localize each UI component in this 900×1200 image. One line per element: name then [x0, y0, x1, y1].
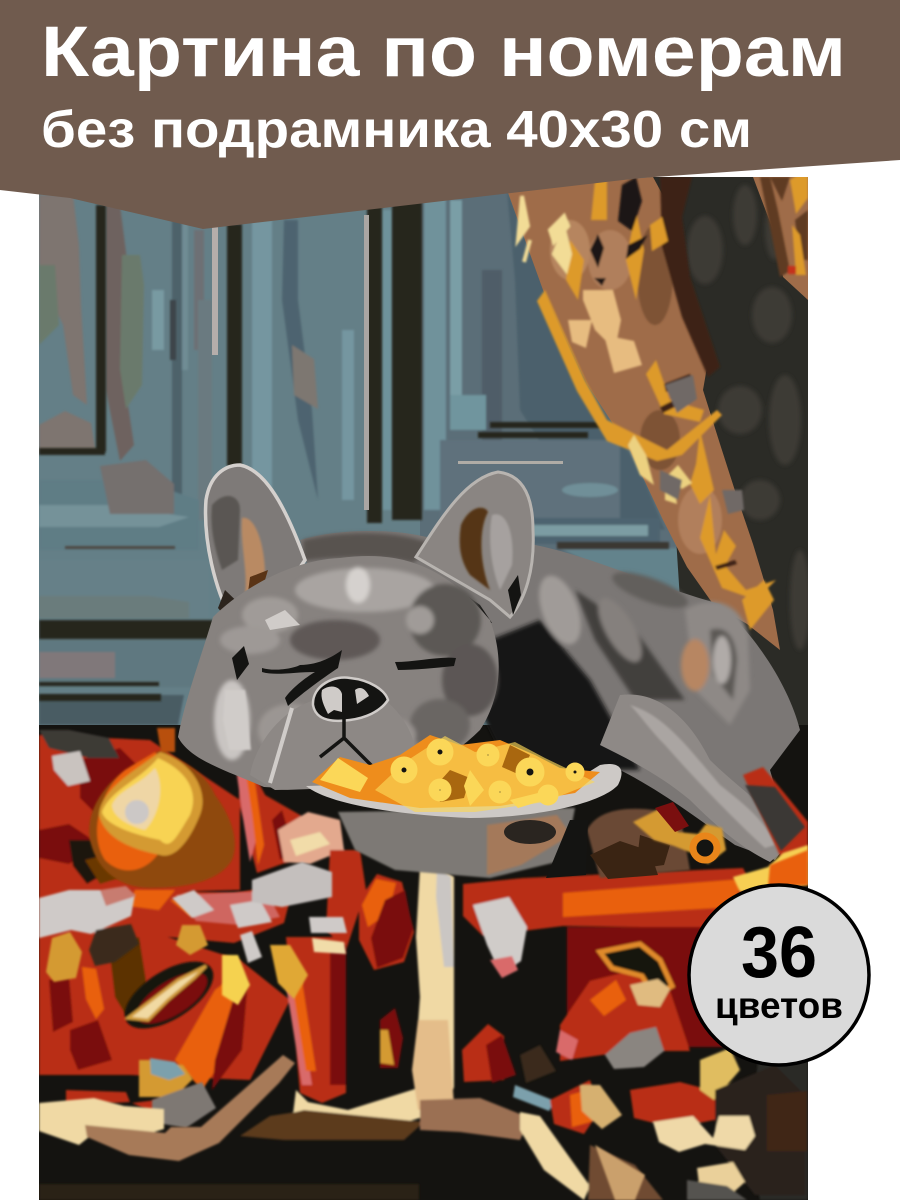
tablecloth [39, 725, 808, 1200]
title: Картина по номерам [41, 13, 846, 92]
nose [313, 677, 388, 721]
door dark mouldings [39, 200, 669, 701]
badge: 36 colours [689, 885, 869, 1065]
cream and brown sash [39, 867, 663, 1200]
left ear [206, 465, 305, 620]
front leg [600, 694, 790, 862]
subtitle: без подрамника 40х30 см [41, 101, 752, 159]
bulldog body [300, 531, 800, 860]
painting: sleeping French bulldog at a table [39, 168, 810, 1200]
curtain gold drape [507, 168, 808, 650]
jowl and muzzle [263, 706, 412, 790]
right ear [416, 472, 533, 617]
paw and spilled rings [587, 767, 808, 892]
bulldog [178, 465, 800, 862]
dark wall right of curtain [653, 177, 808, 725]
head [178, 556, 499, 788]
badge label: цветов [715, 985, 843, 1026]
leaf ornament [123, 960, 215, 1030]
badge number: 36 [741, 913, 817, 993]
pear [89, 728, 235, 888]
right side pattern [462, 868, 808, 1200]
header banner [0, 0, 900, 229]
lower-left orange base [139, 1058, 216, 1128]
white flower band [39, 862, 347, 1005]
door background [39, 177, 680, 725]
bowl of yellow rings [306, 735, 622, 878]
eyes [262, 650, 342, 706]
